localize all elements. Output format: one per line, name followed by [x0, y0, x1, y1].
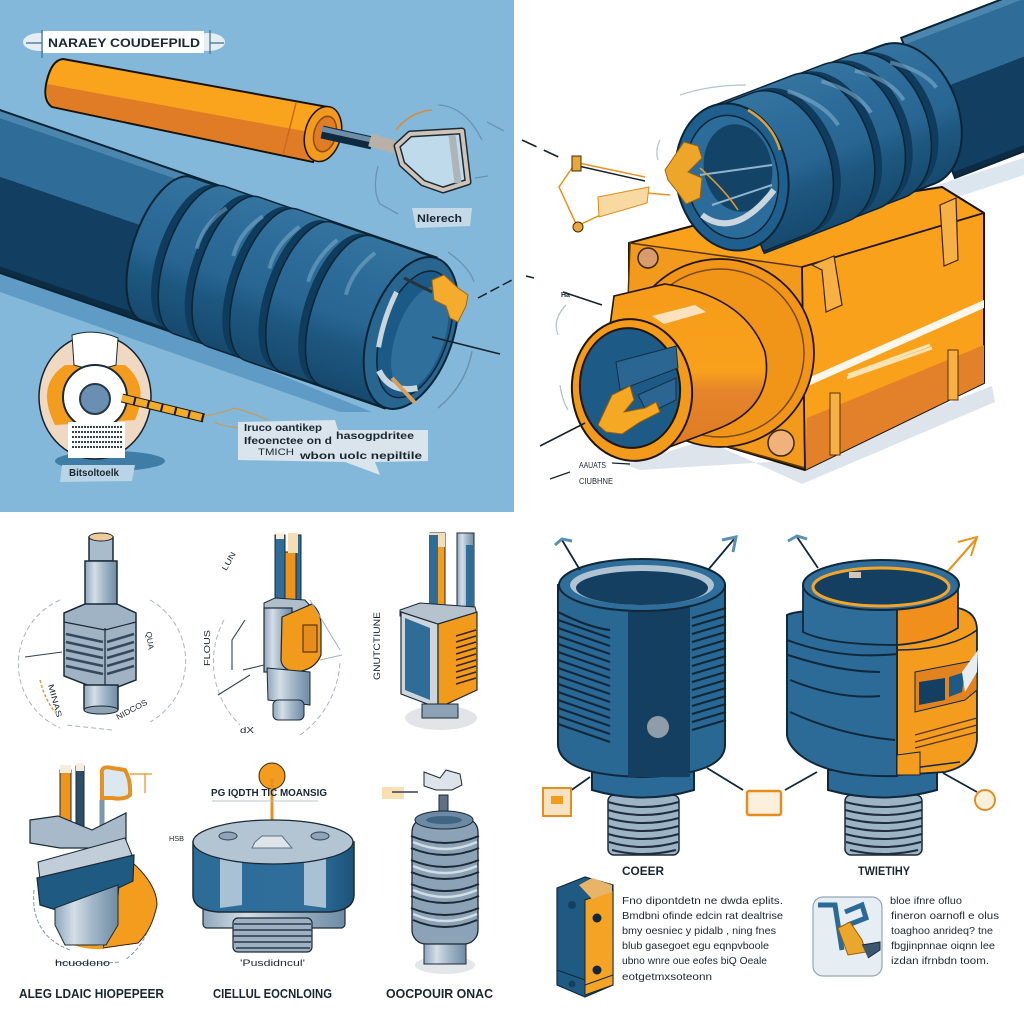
orange foot: [897, 752, 920, 775]
split blue and orange connector: [785, 536, 995, 855]
hose shadow: [905, 158, 1024, 203]
screw heads: [638, 248, 658, 268]
caption 3: OOCPOUIR ONAC: [386, 987, 493, 1001]
small labels: CIUBHNE: [579, 477, 613, 486]
panel: six small connectors: [18, 533, 493, 1001]
inset caption: [60, 465, 135, 482]
callout text block: Iruco oantikep: [244, 422, 322, 434]
block shadow: [625, 386, 995, 484]
arrows top: [555, 537, 736, 570]
label: twietihy: TWIETIHY: [858, 864, 910, 878]
connector 5: PG IQDTH TIC MOANSIG: [211, 788, 327, 799]
connector 1: [18, 533, 186, 730]
text block: twietihy description: bloe ifnre ofluo: [890, 895, 962, 907]
rod shaft and loop: [322, 132, 372, 143]
text block: cover description: eotgetmxsoteonn: [622, 971, 712, 983]
connector 2: dX: [240, 726, 255, 735]
tube shadow: [0, 268, 372, 412]
connector 2: LUN: [220, 550, 238, 572]
exploded wire callout: [522, 85, 746, 479]
nozzle: [565, 259, 814, 467]
text block: cover description: ubno wnre oue eofes biQ Oeale: [622, 955, 767, 967]
connector 2: [203, 533, 342, 735]
connector 3: GNUTCTIUNE: [372, 612, 382, 680]
inset circle diagram: [39, 332, 268, 471]
label: cover: COEER: [622, 864, 664, 878]
connector 1: MINAS: [46, 683, 64, 718]
icon: terminal block: [557, 877, 613, 997]
top collar: [803, 585, 897, 645]
callout text block: hasogpdritee: [336, 430, 414, 442]
orange window: [915, 660, 977, 712]
connector 1: QUA: [144, 631, 156, 651]
big blue tube: [0, 88, 477, 422]
small labels: [561, 292, 613, 486]
callout text block: TMICH: [258, 447, 294, 457]
tube connector gold tip: [392, 252, 512, 408]
icon: connector detail: [813, 897, 882, 976]
connector 4: [30, 763, 157, 968]
orange block: [628, 187, 984, 470]
caption 2: CIELLUL EOCNLOING: [213, 987, 332, 1001]
title banner: NARAEY COUDEFPILD: [48, 36, 200, 50]
blue connector: [543, 537, 781, 855]
text block: cover description: blub gasegoet egu eqnpvboole: [622, 940, 769, 952]
small label: loop: Nlerech: [417, 213, 462, 225]
gold lead: [122, 398, 204, 418]
arrows top: [788, 536, 818, 568]
caption 1: ALEG LDAIC HIOPEPEER: [19, 987, 164, 1001]
connector 5: 'Pusdidncul': [240, 958, 305, 968]
text block: cover description: Bmdbni ofinde edcin rat dealtrise: [622, 910, 783, 922]
panel: orange block and blue hose: [514, 0, 1024, 512]
text block: twietihy description: fbgjinpnnae oiqnn lee: [891, 940, 995, 952]
hose: [708, 0, 1024, 253]
text block: twietihy description: [890, 895, 999, 967]
callout text block: Ifeoenctee on d: [244, 435, 332, 447]
text block: twietihy description: toaghoo anrideq? tne: [891, 925, 993, 937]
text block: cover description: bmy oesniec y pidalb , ning fnes: [622, 925, 776, 937]
connector 6: [382, 770, 479, 974]
small labels: Ha: [561, 292, 570, 299]
small label: loop: [412, 208, 472, 228]
callouts: [785, 772, 977, 792]
connector 1: NIDCOS: [115, 698, 149, 722]
connector 4: hcuodono: [55, 958, 110, 968]
top tab slots: [812, 198, 958, 312]
callouts: [563, 768, 743, 796]
panel: blue tube and rod scene: [0, 0, 514, 512]
connector 3: [372, 533, 477, 730]
connector 5: HSB: [169, 836, 184, 843]
text block: cover description: [622, 895, 783, 983]
orange rod: [45, 59, 504, 214]
hose opening: [664, 94, 800, 260]
title banner: [23, 30, 225, 58]
text block: twietihy description: fineron oarnofl e olus: [891, 910, 999, 922]
inset caption: Bitsoltoelk: [69, 468, 119, 479]
gold clip: [665, 142, 702, 204]
panel: two large connectors: [543, 536, 999, 997]
connector 5: [169, 763, 354, 968]
small labels: AAUATS: [579, 461, 606, 470]
text block: twietihy description: izdan ifrnbdn toom.: [891, 955, 989, 967]
connector 2: FLOUS: [203, 630, 212, 666]
callout text block: wbon uolc nepiltile: [299, 450, 422, 462]
text block: cover description: Fno dipontdetn ne dwda eplits.: [622, 895, 783, 907]
callout text block: [238, 420, 428, 475]
